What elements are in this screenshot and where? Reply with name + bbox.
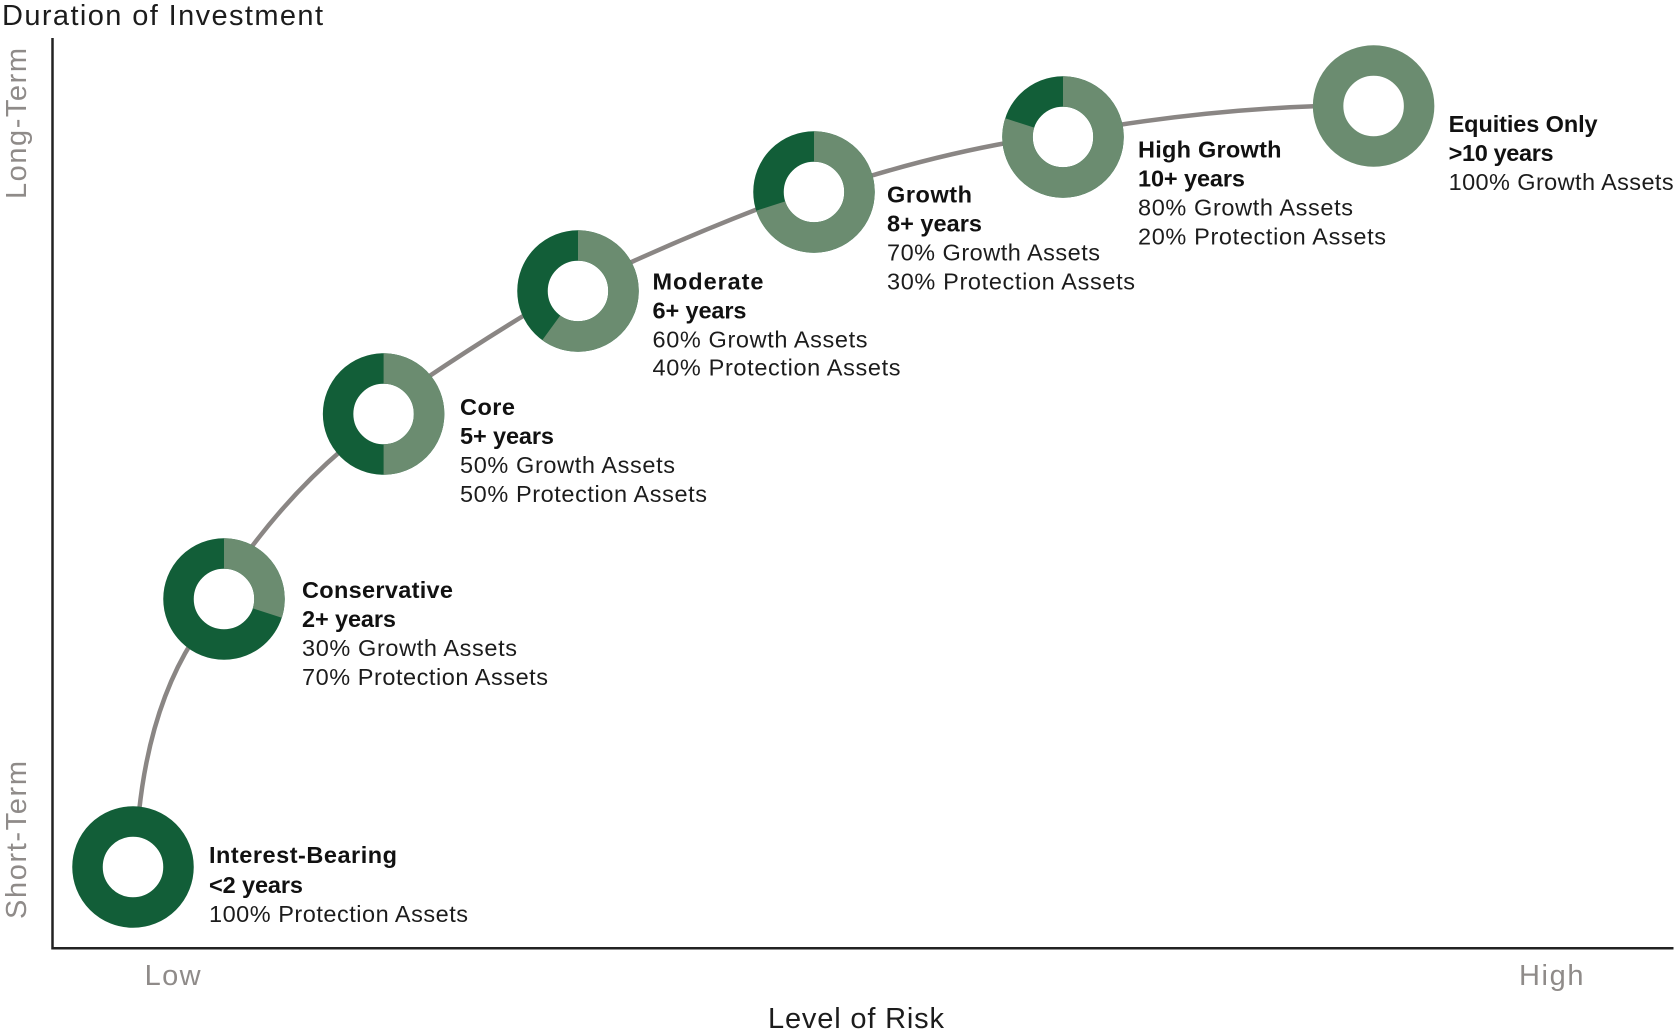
donut: high growth [1018, 92, 1108, 182]
label: equities only [1449, 111, 1674, 195]
label: growth: 70% Growth Assets [887, 240, 1100, 266]
label: moderate: 40% Protection Assets [652, 354, 900, 380]
label: equities only: Equities Only [1449, 111, 1598, 137]
label: high growth [1138, 136, 1386, 250]
label: equities only: >10 years [1449, 140, 1554, 166]
label: high growth: 20% Protection Assets [1138, 224, 1386, 250]
label: moderate: 60% Growth Assets [652, 326, 868, 352]
label: conservative: 70% Protection Assets [302, 664, 548, 690]
risk curve [139, 106, 1320, 812]
label: high growth: 80% Growth Assets [1138, 194, 1353, 220]
label: moderate: 6+ years [652, 298, 746, 324]
x axis label: low: Low [145, 960, 202, 992]
donut: growth [768, 146, 860, 238]
y axis label: short-term: Short-Term [1, 761, 33, 919]
label: interest-bearing: 100% Protection Assets [209, 901, 468, 927]
label: high growth: 10+ years [1138, 166, 1245, 192]
label: interest-bearing: <2 years [209, 872, 303, 898]
donut: interest-bearing [88, 822, 178, 912]
label: core: Core [460, 394, 515, 420]
label: conservative [302, 577, 548, 690]
label: moderate [652, 268, 900, 380]
label: moderate: Moderate [652, 268, 764, 294]
label: equities only: 100% Growth Assets [1449, 169, 1674, 195]
donut: equities only [1328, 60, 1419, 152]
label: growth [887, 182, 1135, 294]
x axis title: Level of Risk [768, 1003, 944, 1035]
y axis label: long-term: Long-Term [1, 48, 33, 199]
label: interest-bearing: Interest-Bearing [209, 842, 397, 868]
donut: moderate [532, 246, 624, 336]
label: growth: 8+ years [887, 210, 982, 236]
label: core [460, 394, 707, 507]
label: core: 50% Protection Assets [460, 481, 707, 507]
label: growth: Growth [887, 182, 972, 208]
label: interest-bearing [209, 842, 468, 927]
x axis label: high: High [1519, 960, 1584, 992]
label: conservative: Conservative [302, 577, 453, 603]
donut: conservative [178, 554, 270, 644]
label: high growth: High Growth [1138, 136, 1282, 162]
label: core: 5+ years [460, 423, 554, 449]
heading: y axis title: Duration of Investment [2, 0, 323, 32]
label: conservative: 30% Growth Assets [302, 635, 517, 661]
label: core: 50% Growth Assets [460, 452, 675, 478]
label: conservative: 2+ years [302, 606, 396, 632]
donut: core [338, 368, 429, 460]
label: growth: 30% Protection Assets [887, 268, 1135, 294]
